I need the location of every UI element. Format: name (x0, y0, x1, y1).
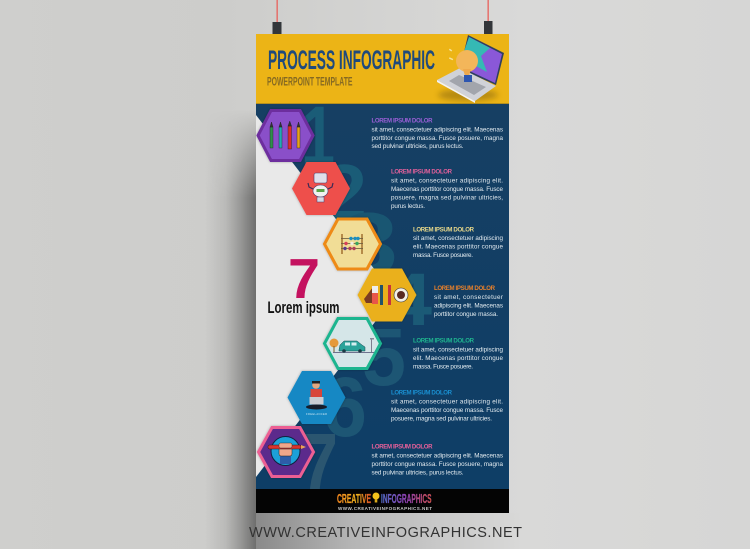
text block 6: Maecenas porttitor congue massa. Fusce (391, 407, 503, 414)
white diagonal panel (256, 115, 395, 477)
text block 1 (372, 118, 503, 150)
text block 3: elit. Maecenas porttitor congue (413, 244, 503, 250)
navy panel (256, 104, 509, 489)
black footer band (256, 489, 509, 513)
text block 3: sit amet, consectetuer adipiscing (413, 235, 503, 242)
ghost numbers 1-7: 5 (362, 312, 406, 403)
ghost numbers 1-7 (304, 106, 432, 489)
text block 1: sed pulvinar ultricies, purus lectus. (372, 143, 464, 150)
icon: pens (270, 121, 300, 149)
ghost numbers 1-7: 7 (300, 415, 338, 514)
text block 7 (372, 444, 503, 476)
text block 5 (413, 338, 503, 370)
text block 2: Maecenas porttitor congue massa. Fusce (391, 186, 503, 193)
icon: art tools and eye (364, 285, 408, 305)
text block 6 (391, 390, 503, 422)
text block 2: sit amet, consectetuer adipiscing elit. (391, 178, 503, 184)
title: PROCESS INFOGRAPHIC (268, 45, 435, 75)
icon: car and tree (330, 338, 374, 353)
text block 5: sit amet, consectetuer adipiscing (413, 346, 503, 354)
hexagon 7: fist with pencil (258, 428, 314, 476)
icon: abacus (341, 234, 363, 254)
icon: fist with pencil (268, 436, 306, 466)
footer logo: CREATIVE (337, 491, 371, 506)
ghost numbers 1-7: 6 (322, 360, 367, 454)
icon: robot (308, 173, 333, 202)
text block 4: LOREM IPSUM DOLOR (434, 285, 496, 292)
icon: logo bulb (372, 492, 380, 502)
hexagon 1: pens (258, 110, 313, 160)
text block 3: LOREM IPSUM DOLOR (413, 226, 475, 234)
website caption: WWW.CREATIVEINFOGRAPHICS.NET (249, 525, 522, 541)
footer logo: INFOGRAPHICS (381, 491, 432, 506)
footer logo: WWW.CREATIVEINFOGRAPHICS.NET (338, 506, 432, 511)
subtitle: POWERPOINT TEMPLATE (267, 74, 353, 88)
hexagon 3: abacus (324, 219, 380, 269)
text block 4: porttitor congue massa. (434, 311, 498, 318)
text block 7: sed pulvinar ultricies, purus lectus. (372, 470, 464, 476)
text block 6: LOREM IPSUM DOLOR (391, 390, 453, 396)
ghost numbers 1-7: 4 (386, 258, 432, 341)
ghost numbers 1-7: 1 (301, 89, 335, 183)
hexagon 5: car (324, 318, 380, 368)
text block 5: massa. Fusce posuere. (413, 364, 473, 370)
text block 5: LOREM IPSUM DOLOR (413, 338, 475, 344)
background wall (4, 0, 466, 549)
text block 4: adipiscing elit. Maecenas (434, 302, 503, 310)
hexagon 4: art tools (358, 268, 416, 322)
footer logo (337, 491, 432, 511)
hexagon 2: robot (292, 162, 350, 215)
icon: laptop with light bulb (437, 35, 504, 103)
text block 2 (391, 168, 503, 210)
text block 3: massa. Fusce posuere. (413, 252, 473, 259)
text block 1: LOREM IPSUM DOLOR (372, 118, 433, 124)
text block 2: purus lectus. (391, 203, 425, 210)
text block 1: sit amet, consectetuer adipiscing elit. Maecenas (372, 126, 503, 134)
hexagon 6: freelancer (288, 371, 346, 424)
text block 6: posuere, magna sed pulvinar ultricies. (391, 416, 492, 422)
hanging clips (272, 0, 492, 39)
poster (256, 34, 509, 514)
text block 1: porttitor congue massa. Fusce posuere, magna (372, 135, 503, 142)
header band (256, 34, 509, 105)
ghost numbers 1-7: 3 (340, 194, 398, 293)
text block 4 (434, 285, 503, 318)
text block 7: sit amet, consectetuer adipiscing elit. Maecenas (372, 452, 503, 460)
text block 5: elit. Maecenas porttitor congue (413, 355, 503, 362)
text block 7: LOREM IPSUM DOLOR (372, 444, 433, 450)
icon: freelancer with laptop: FREELANCER (306, 412, 327, 416)
lorem ipsum label: Lorem ipsum (268, 299, 340, 317)
text block 2: posuere, magna sed pulvinar ultricies, (391, 194, 503, 202)
ghost numbers 1-7: 2 (322, 148, 367, 237)
text block 7: porttitor congue massa. Fusce posuere, magna (372, 461, 503, 468)
text block 3 (413, 226, 503, 259)
text block 4: sit amet, consectetuer (434, 294, 503, 301)
text block 6: sit amet, consectetuer adipiscing elit. (391, 398, 503, 406)
text block 2: LOREM IPSUM DOLOR (391, 168, 453, 176)
big number 7: 7 (288, 247, 320, 311)
